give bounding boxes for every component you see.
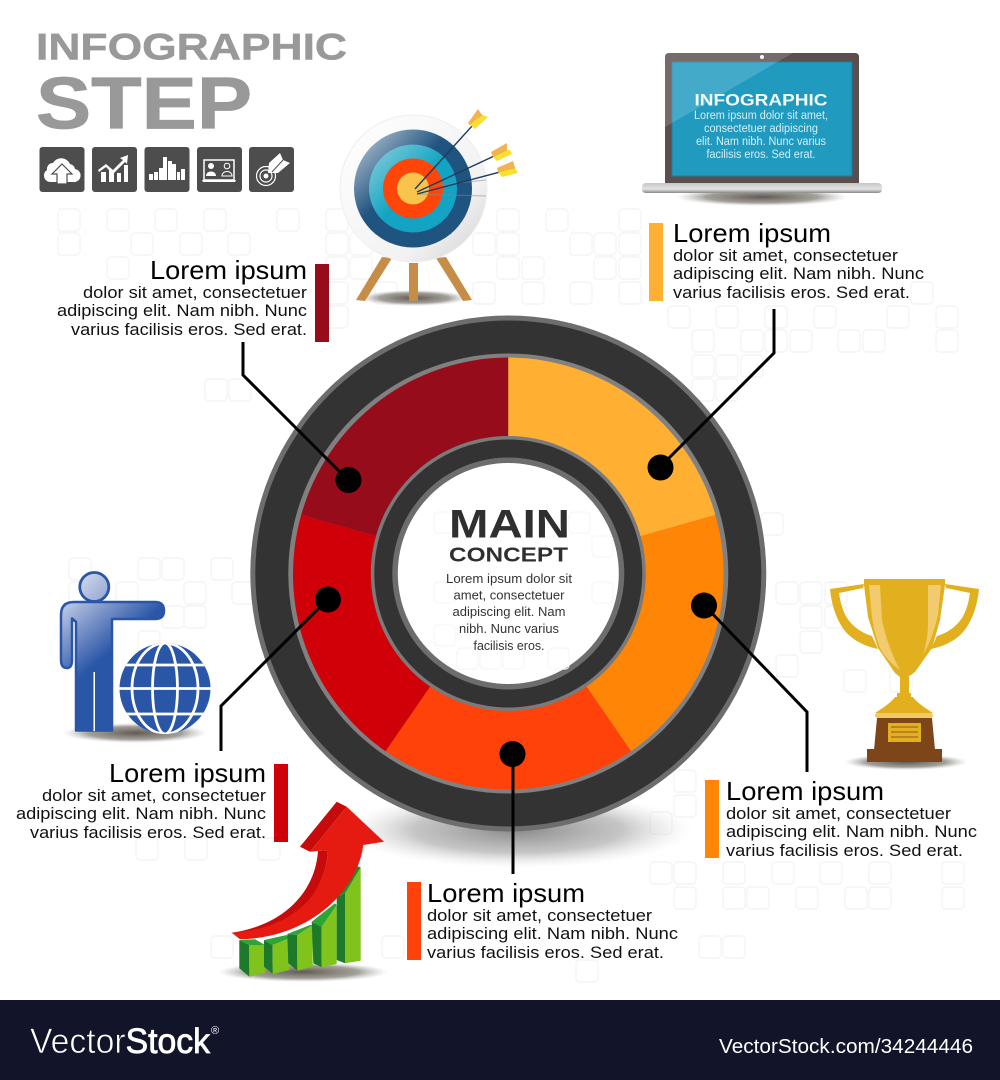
callout: right: [705, 776, 978, 860]
laptop screen text: facilisis eros. Sed erat.: [706, 147, 816, 161]
illustration: growth arrow over bars: [218, 802, 388, 982]
centre text: amet, consectetuer: [454, 588, 565, 602]
callout: top left: dolor sit amet, consectetuer: [83, 283, 307, 302]
illustration: trophy: [830, 579, 979, 770]
callout: bottom: adipiscing elit. Nam nibh. Nunc: [427, 924, 679, 943]
centre text: [446, 571, 572, 653]
centre heading: main concept: [449, 502, 570, 566]
callout: left: Lorem ipsum: [109, 758, 266, 788]
illustration: archery target: [340, 109, 518, 306]
footer url: VectorStock.com/34244446: [719, 1036, 973, 1058]
callout: left: varius facilisis eros. Sed erat.: [30, 823, 266, 842]
callout: right: varius facilisis eros. Sed erat.: [726, 841, 963, 860]
segment 3: orange: [508, 515, 724, 751]
connector: top right: [648, 309, 774, 480]
connector: bottom: [500, 741, 526, 874]
segment 1: dark red: [301, 358, 508, 574]
growth bars: [239, 866, 361, 977]
callout: top left: varius facilisis eros. Sed erat.: [71, 320, 307, 339]
centre text: Lorem ipsum dolor sit: [446, 571, 572, 586]
icon row: [40, 147, 294, 192]
laptop screen text: elit. Nam nibh. Nunc varius: [696, 134, 826, 148]
callout: right: dolor sit amet, consectetuer: [726, 804, 951, 823]
illustration: person with globe: [61, 572, 215, 743]
centre heading: main concept: MAIN: [449, 502, 570, 546]
centre text: nibh. Nunc varius: [459, 621, 559, 636]
globe: [115, 643, 215, 734]
segment 5: red: [293, 515, 508, 751]
icon: target with arrow: [249, 147, 294, 192]
callout: top right: Lorem ipsum: [673, 218, 831, 248]
callout: bottom: [407, 878, 679, 962]
segment 4: red orange: [386, 574, 631, 790]
laptop screen text: Lorem ipsum dolor sit amet,: [694, 108, 828, 122]
callout: left: adipiscing elit. Nam nibh. Nunc: [16, 804, 267, 823]
callout: top left: adipiscing elit. Nam nibh. Nunc: [57, 301, 308, 320]
callout: top right: [649, 218, 925, 302]
connector: left: [221, 586, 341, 751]
callout: top right: varius facilisis eros. Sed erat.: [673, 283, 910, 302]
laptop screen text: [694, 108, 828, 161]
segment 2: amber: [508, 358, 715, 574]
connector: right: [691, 592, 807, 772]
callout: top right: dolor sit amet, consectetuer: [673, 246, 898, 265]
footer bar: [0, 1000, 1000, 1080]
callout: right: Lorem ipsum: [726, 776, 884, 806]
trophy handles: [830, 584, 979, 649]
centre text: facilisis eros.: [474, 638, 544, 653]
callout: left: [16, 758, 288, 842]
footer registered mark: ®: [211, 1025, 219, 1037]
callout: right: adipiscing elit. Nam nibh. Nunc: [726, 822, 978, 841]
title: [36, 26, 347, 144]
callout: bottom: Lorem ipsum: [427, 878, 585, 908]
callout: left: dolor sit amet, consectetuer: [42, 786, 266, 805]
red arrow: [232, 802, 384, 939]
callout: top right: adipiscing elit. Nam nibh. Nunc: [673, 264, 925, 283]
centre heading: main concept: CONCEPT: [449, 544, 568, 566]
main circular diagram: [250, 316, 766, 832]
laptop screen heading: INFOGRAPHIC: [694, 90, 828, 110]
callout: top left: [57, 255, 329, 342]
footer logo: VectorStock: [30, 1022, 210, 1061]
wheel shadow: [343, 792, 693, 868]
icon: bar chart: [144, 147, 190, 192]
connector: top left: [243, 342, 362, 493]
callout: top left: Lorem ipsum: [150, 255, 307, 285]
trophy cup: [864, 579, 945, 677]
icon: rising bars: [92, 147, 137, 192]
icon: cloud upload: [40, 147, 84, 192]
callout: bottom: varius facilisis eros. Sed erat.: [427, 943, 664, 962]
callout: bottom: dolor sit amet, consectetuer: [427, 906, 652, 925]
laptop screen text: consectetuer adipiscing: [704, 121, 818, 135]
illustration: laptop: [642, 53, 882, 206]
icon: laptop with people: [197, 147, 242, 192]
person: [61, 572, 164, 731]
centre text: adipiscing elit. Nam: [452, 604, 566, 619]
title: INFOGRAPHIC: [36, 26, 347, 68]
title: STEP: [36, 64, 252, 144]
